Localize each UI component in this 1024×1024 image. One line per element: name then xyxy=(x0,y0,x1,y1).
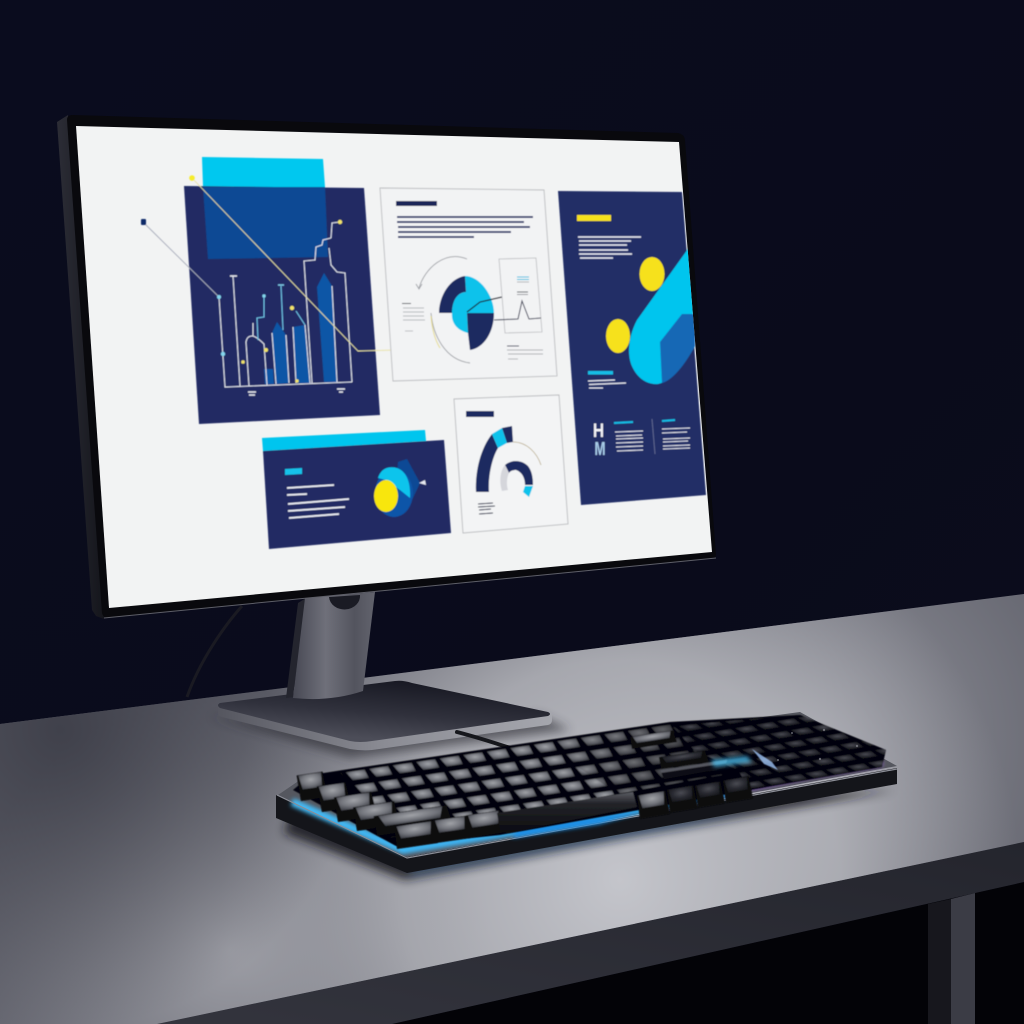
yellow circle upper xyxy=(640,257,664,291)
stand foot top xyxy=(218,681,550,742)
blue overlay block xyxy=(203,187,328,259)
blue shape facet xyxy=(660,314,695,383)
panel outline xyxy=(380,188,557,381)
icon letter H: H xyxy=(593,421,604,442)
highlights on right keys xyxy=(777,729,858,761)
panel: ring chart xyxy=(454,395,568,533)
desk leg xyxy=(928,893,975,1024)
cyan key light xyxy=(711,756,752,767)
body text lines xyxy=(397,217,533,237)
spacebar xyxy=(497,792,637,833)
tan arc xyxy=(513,442,541,465)
keyboard shadow xyxy=(284,790,895,880)
inner ring navy xyxy=(505,461,533,485)
yellow ellipse xyxy=(374,480,398,512)
footer divider xyxy=(652,419,655,454)
stand foot lip xyxy=(218,705,552,750)
key group softened xyxy=(293,715,886,849)
axis tick dashes xyxy=(230,276,345,395)
monitor xyxy=(57,115,716,619)
pie navy bottom sector xyxy=(467,313,494,350)
cyan tag xyxy=(285,468,302,475)
stand neck side xyxy=(286,598,306,698)
navy panel xyxy=(184,186,380,424)
pie cyan sectors xyxy=(452,276,494,333)
white marker xyxy=(419,480,426,485)
bezel lower highlight xyxy=(104,558,716,618)
panel title bar xyxy=(396,201,437,206)
outer arc navy xyxy=(476,434,498,492)
white text lines xyxy=(287,485,349,518)
small chart box xyxy=(499,258,542,333)
stand foot shadow xyxy=(210,715,570,758)
cyan header block xyxy=(202,157,325,187)
keyboard top edge highlight xyxy=(277,769,897,858)
ring caption lines xyxy=(478,503,495,514)
keyboard base top strip xyxy=(278,712,897,857)
panel title bar xyxy=(466,411,494,417)
left column keys xyxy=(296,772,505,849)
cyan chart traces xyxy=(257,222,340,340)
keyboard xyxy=(276,712,897,880)
icon letter M: M xyxy=(594,439,606,459)
cable behind monitor xyxy=(187,606,242,697)
spacebar glow xyxy=(512,812,640,838)
panel: document with pie chart xyxy=(380,188,557,381)
dark blue ellipse xyxy=(375,469,413,517)
gray arc with arrows xyxy=(416,257,470,363)
desk front edge xyxy=(157,842,1024,1024)
monitor left side casing xyxy=(57,115,104,619)
inner ring gray xyxy=(500,465,509,491)
panel: summary card xyxy=(262,430,451,549)
outer arc cyan xyxy=(492,428,507,448)
navy card xyxy=(263,440,451,549)
main key block xyxy=(340,724,722,838)
yellow title xyxy=(577,215,611,221)
keyboard base front xyxy=(276,768,897,873)
dark fade on right keys xyxy=(540,724,722,795)
inner ring cyan xyxy=(523,486,533,497)
outer arc navy top xyxy=(502,426,513,443)
footer text columns xyxy=(615,428,690,451)
monitor bezel xyxy=(67,115,716,618)
right key block xyxy=(672,715,886,790)
screen xyxy=(76,126,712,608)
cyan shape xyxy=(629,246,695,384)
stand hole xyxy=(329,595,360,609)
left caption lines xyxy=(402,304,425,331)
caption lines xyxy=(588,380,626,388)
footer cyan dashes xyxy=(614,420,675,423)
pointer lines xyxy=(145,224,219,297)
panel: poster with yellow circles xyxy=(558,191,706,505)
blue bars xyxy=(264,273,337,384)
bright cyan purple streak xyxy=(752,749,778,770)
monitor cable to keyboard xyxy=(457,732,510,748)
blue wedge xyxy=(396,459,420,500)
white text lines xyxy=(578,237,641,258)
chart points xyxy=(141,219,342,383)
desk top surface xyxy=(0,590,1024,1024)
cyan ellipse segment xyxy=(378,467,410,498)
yellow arc accent xyxy=(431,316,440,348)
panel: bar chart xyxy=(141,157,380,424)
right purple glow xyxy=(750,763,882,787)
dark trend line xyxy=(467,297,502,312)
under-desk darkness xyxy=(392,882,1024,1024)
monitor stand xyxy=(210,592,570,758)
long function keys xyxy=(629,730,727,779)
pie navy top sector xyxy=(439,276,466,313)
keys right of spacebar xyxy=(636,776,753,819)
spike line xyxy=(494,301,541,320)
small chart legend xyxy=(517,277,529,294)
cyan header strip xyxy=(262,430,426,451)
navy panel xyxy=(558,191,706,505)
right caption lines xyxy=(507,346,543,359)
yellow connector line xyxy=(188,174,391,352)
keyboard blue light spill xyxy=(410,812,760,876)
screen content xyxy=(141,157,706,549)
key mass xyxy=(293,715,886,846)
panel outline xyxy=(454,395,568,533)
yellow circle lower xyxy=(606,319,630,353)
underglow blur xyxy=(292,791,745,850)
chart axes and outlines xyxy=(219,238,352,387)
cyan caption bar xyxy=(588,371,613,374)
stand neck xyxy=(293,592,375,699)
